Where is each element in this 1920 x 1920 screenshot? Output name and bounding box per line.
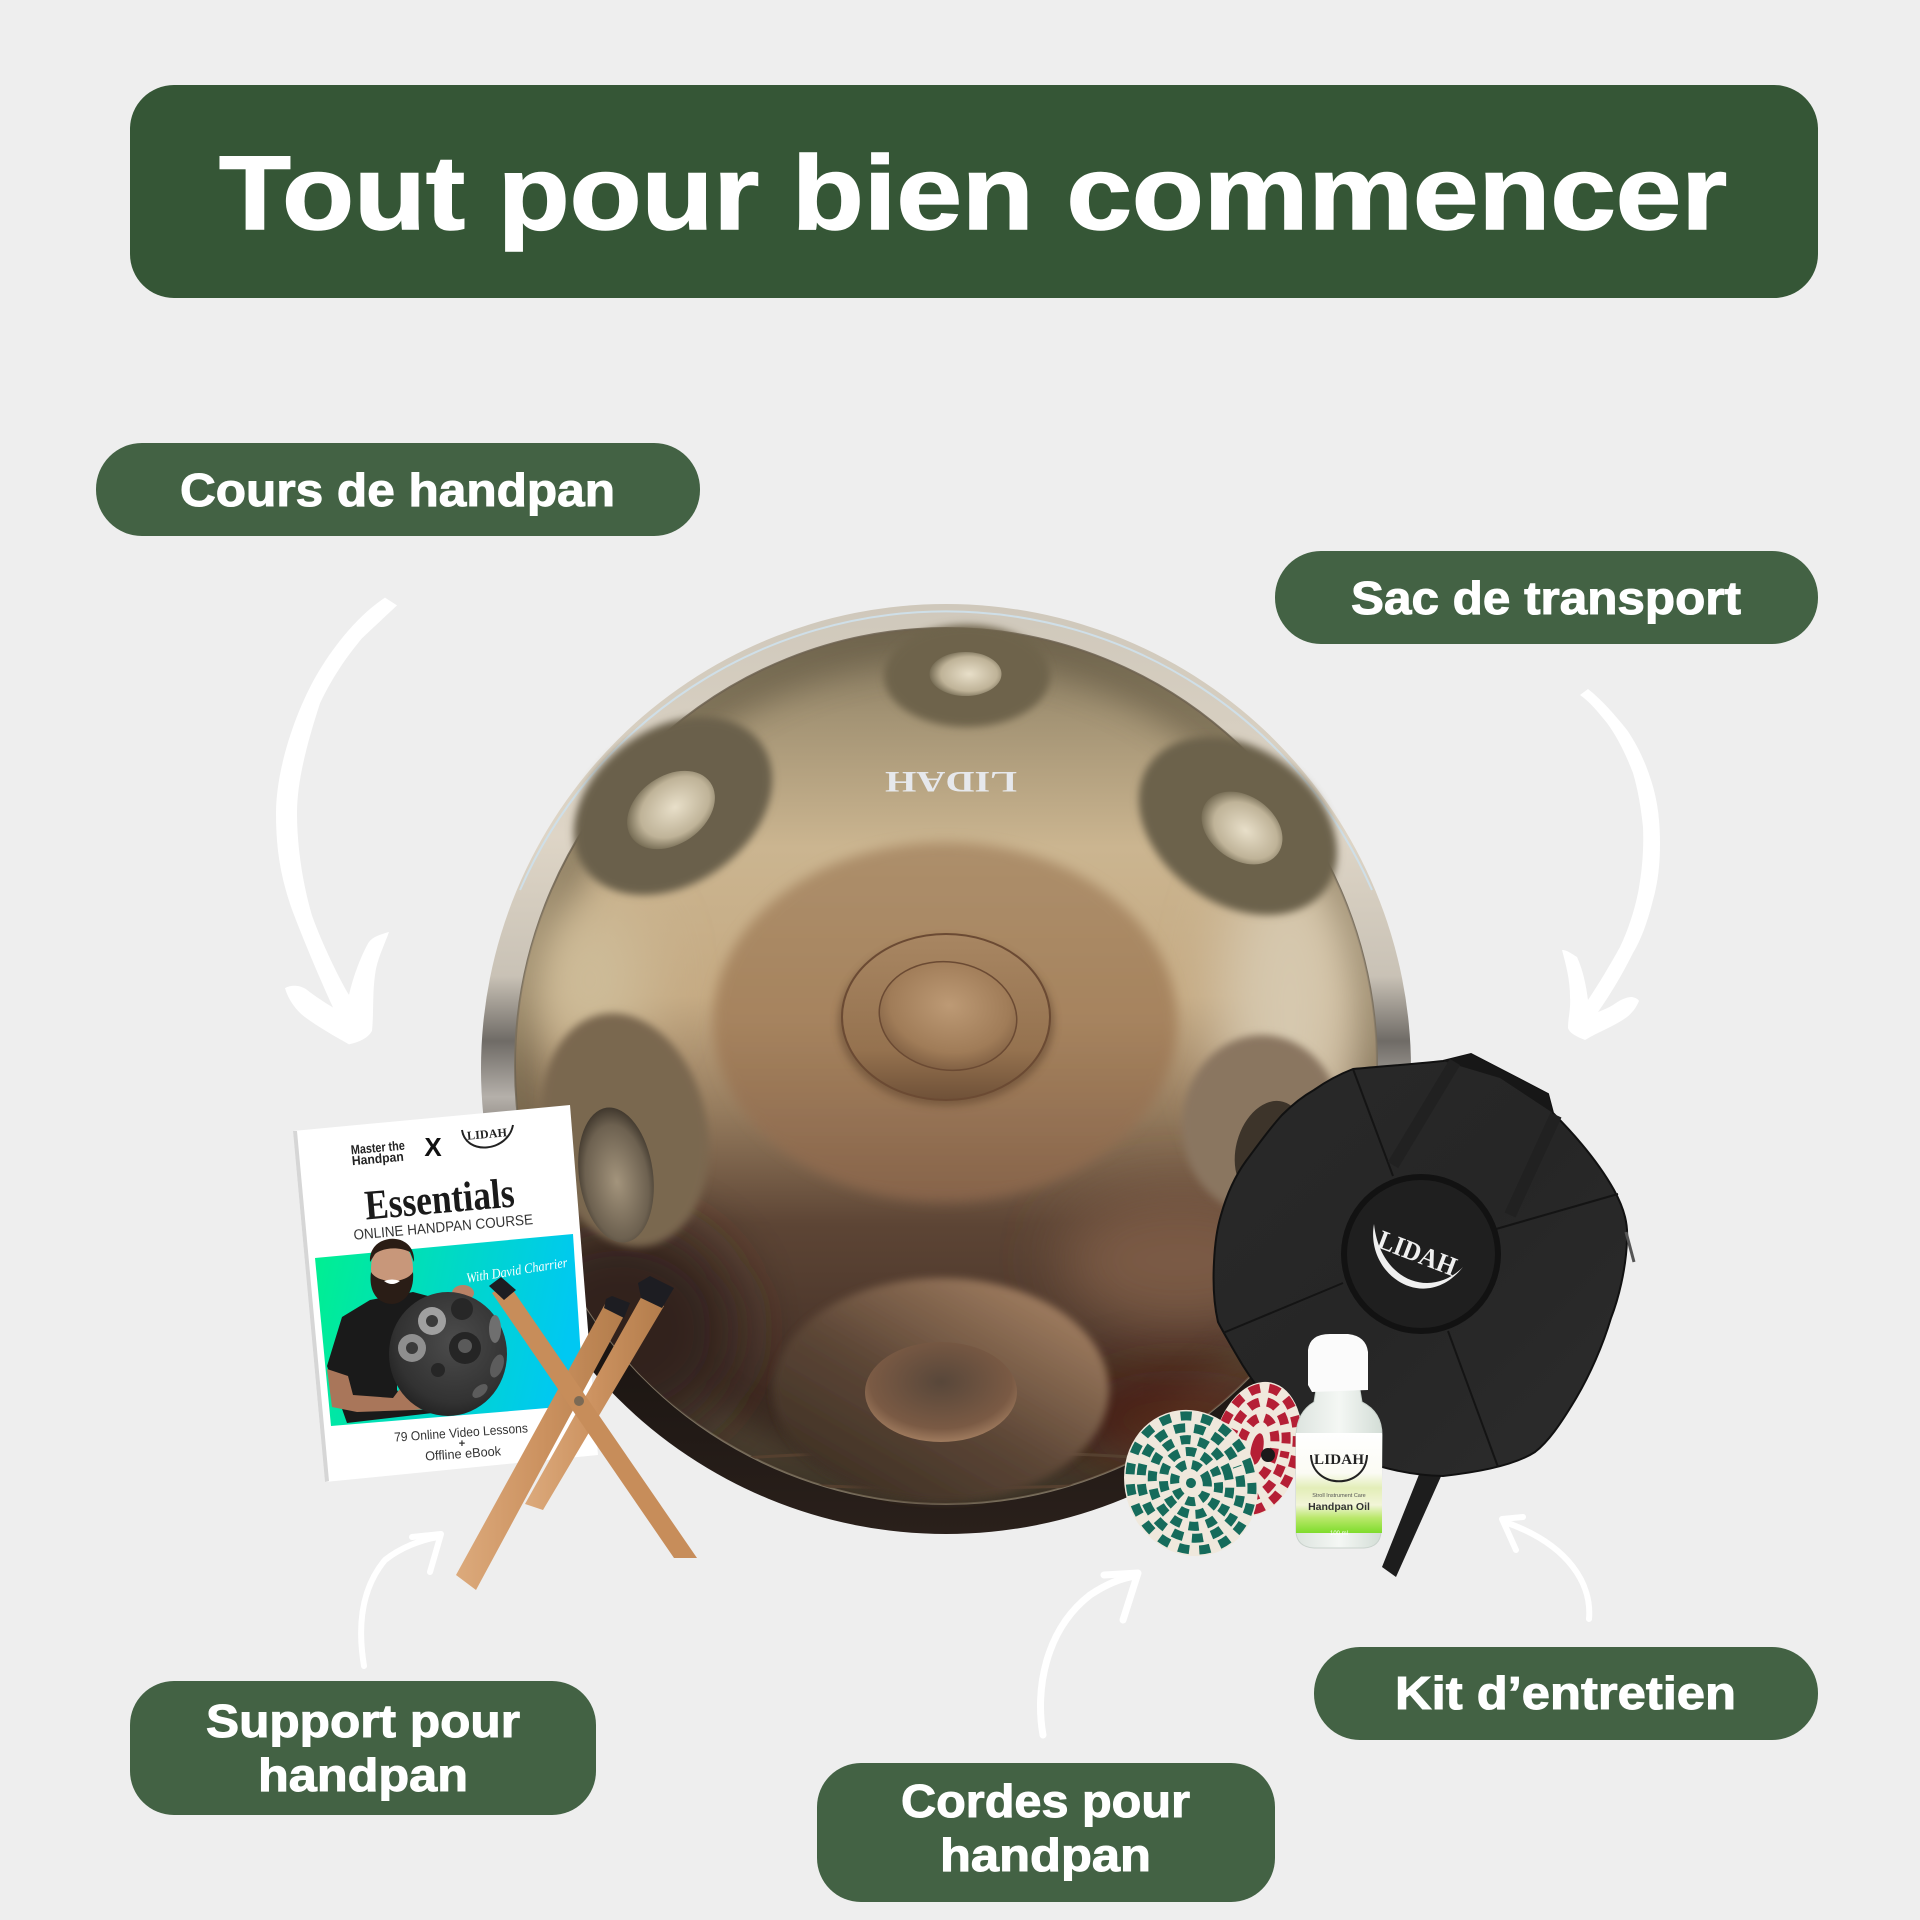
- book footer: +: [459, 1438, 465, 1450]
- book cover: [293, 1105, 598, 1482]
- green cord bag: [1104, 1391, 1278, 1575]
- label pill: Sac de transport: Sac de transport: [1351, 572, 1741, 624]
- bottle label text: Handpan Oil: [1308, 1501, 1370, 1513]
- red cord bag: [1200, 1373, 1314, 1525]
- arrow: Support pour handpan to stand: [361, 1534, 441, 1666]
- label pill: Support pour handpan: [130, 1681, 596, 1815]
- title text: Tout pour bien commencer: [219, 135, 1727, 252]
- handpan: [481, 604, 1411, 1534]
- top note: [884, 625, 1050, 727]
- label pill: Cours de handpan: Cours de handpan: [180, 464, 615, 516]
- handpan cords: [1104, 1373, 1314, 1575]
- LIDAH engraving: LIDAH: [885, 765, 1017, 798]
- label pill: Kit d'entretien: Kit d’entretien: [1395, 1667, 1736, 1719]
- book logos: Master the: [350, 1138, 405, 1157]
- transport bag: [1213, 1054, 1634, 1577]
- bottle label text: Stroll Instrument Care: [1312, 1493, 1366, 1499]
- presenter signature: With David Charrier: [465, 1256, 569, 1287]
- bottle label text: LIDAH: [1314, 1452, 1364, 1468]
- arrow: Cordes pour handpan to cords: [1040, 1573, 1138, 1735]
- book footer: 79 Online Video Lessons: [394, 1420, 529, 1445]
- rear stick: [525, 1276, 674, 1510]
- label pill: Cours de handpan: [96, 443, 700, 536]
- bottom note: [773, 1278, 1109, 1502]
- label pill: Cordes pour handpan: handpan: [940, 1829, 1151, 1881]
- book subtitle: ONLINE HANDPAN COURSE: [353, 1212, 534, 1244]
- bag body: [1213, 1054, 1627, 1476]
- bag zip pull: [1626, 1232, 1634, 1262]
- book logos: Handpan: [351, 1149, 404, 1168]
- central ding: [838, 934, 1054, 1106]
- label pill: Support pour handpan: Support pour: [206, 1695, 520, 1747]
- title banner: [130, 85, 1818, 298]
- bottle label text: 100 ml: [1330, 1531, 1348, 1537]
- bag top handle: [1443, 1054, 1553, 1113]
- handpan rim: [481, 604, 1411, 1534]
- arrow: Kit d'entretien to bag: [1502, 1517, 1589, 1619]
- book logos: LIDAH: [466, 1125, 508, 1143]
- book logos: X: [424, 1132, 442, 1162]
- mini handpan: [389, 1292, 507, 1416]
- left note: [520, 998, 730, 1262]
- bag centre disc: [1341, 1174, 1501, 1334]
- presenter: [327, 1239, 474, 1423]
- handpan shell: [515, 628, 1377, 1504]
- book footer: [394, 1420, 529, 1464]
- arrow: Cours de handpan to course book: [276, 598, 397, 1044]
- book logos: [350, 1125, 513, 1168]
- bottom rim reflection: [750, 1453, 1127, 1488]
- course book: [293, 1105, 598, 1482]
- bag seams: [1223, 1062, 1618, 1467]
- label pill: Cordes pour handpan: [817, 1763, 1275, 1902]
- central shoulder: [713, 842, 1177, 1202]
- bag logo: LIDAH: [1374, 1224, 1461, 1282]
- shell shading: [500, 634, 1371, 1498]
- label pill: Support pour handpan: handpan: [258, 1749, 468, 1801]
- bag strap: [1382, 1472, 1443, 1577]
- right note: [1182, 1035, 1342, 1215]
- bottle label text: [1308, 1452, 1370, 1537]
- middle stick: [456, 1296, 630, 1590]
- label pill: Sac de transport: [1275, 551, 1818, 644]
- bottle glass: [1296, 1390, 1382, 1548]
- bottle cap: [1308, 1334, 1368, 1392]
- label pill: Kit d'entretien: [1314, 1647, 1818, 1740]
- book photo: [315, 1234, 584, 1426]
- book title: Essentials: [363, 1171, 516, 1229]
- bottle label: [1296, 1433, 1382, 1533]
- arrow: Sac de transport to bag: [1562, 689, 1660, 1040]
- handpan oil bottle: [1296, 1334, 1382, 1548]
- label pill: Cordes pour handpan: Cordes pour: [901, 1775, 1190, 1827]
- front stick: [489, 1277, 697, 1558]
- handpan stand: [456, 1276, 697, 1590]
- cord toggle: [1261, 1448, 1275, 1462]
- upper left note: [540, 680, 806, 932]
- upper right note: [1105, 700, 1371, 952]
- book footer: Offline eBook: [425, 1443, 502, 1464]
